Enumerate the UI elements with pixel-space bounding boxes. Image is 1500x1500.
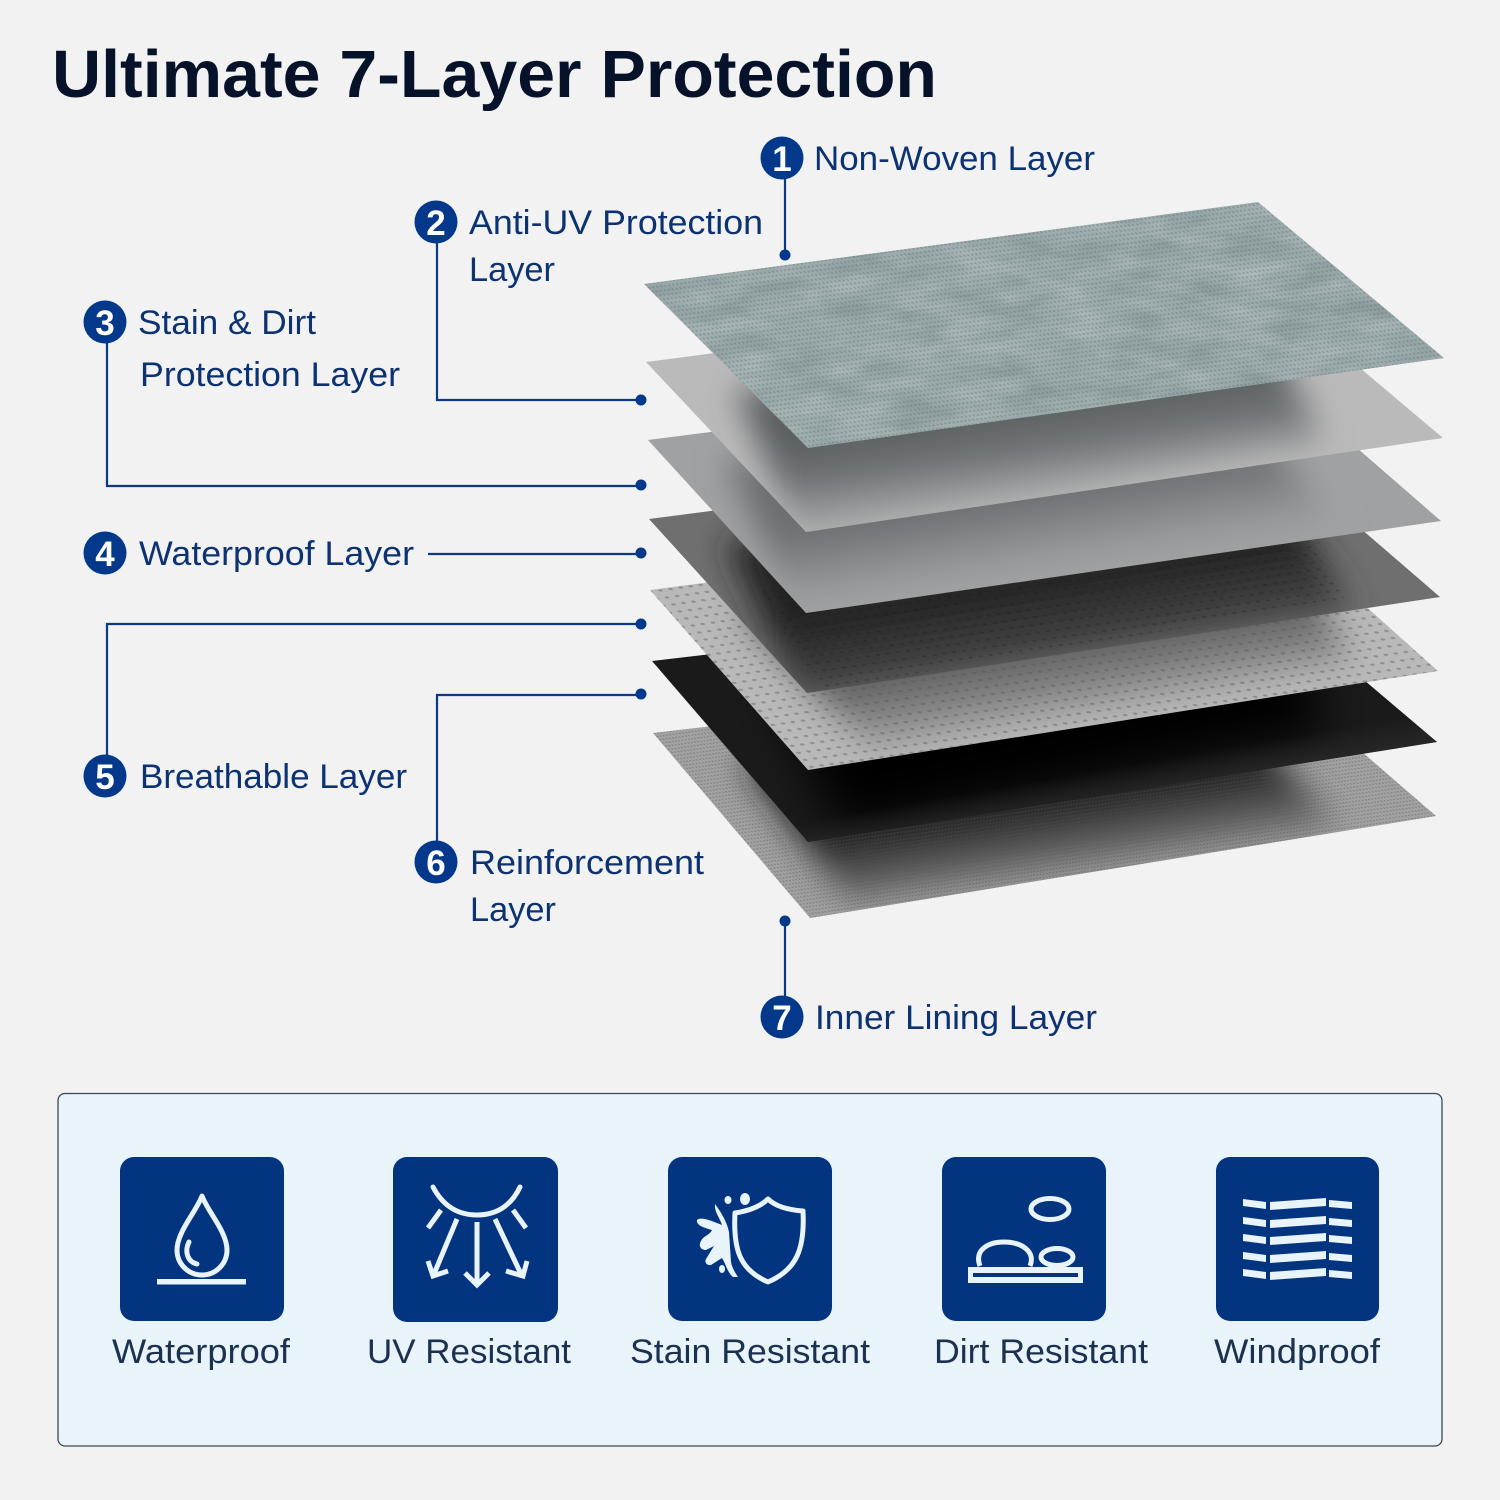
layer 3: stain and dirt protection bbox=[648, 432, 1441, 613]
feature: waterproof bbox=[112, 1157, 291, 1371]
callout 2: anti-UV protection layer: Anti-UV Protection bbox=[469, 204, 763, 242]
callout 3: stain and dirt protection layer: Protection Layer bbox=[140, 356, 400, 394]
icon: wind barrier bbox=[1243, 1198, 1352, 1280]
callout 1: non-woven layer bbox=[760, 136, 1095, 260]
feature: UV resistant: UV Resistant bbox=[367, 1333, 572, 1371]
layer 7: inner lining bbox=[653, 726, 1436, 918]
callout 6: reinforcement layer: Layer bbox=[470, 891, 556, 929]
callout 6: reinforcement layer bbox=[414, 688, 705, 929]
icon: water drop bbox=[157, 1196, 246, 1284]
callout 2: anti-UV protection layer: 2 bbox=[426, 204, 446, 243]
layer 6: reinforcement bbox=[652, 654, 1437, 842]
icon: sun rays with arrows bbox=[428, 1187, 527, 1285]
icon: dirt particles on surface bbox=[968, 1198, 1083, 1283]
layer 5: breathable bbox=[650, 582, 1438, 770]
callout 7: inner lining layer bbox=[760, 916, 1097, 1038]
feature: dirt resistant: Dirt Resistant bbox=[934, 1333, 1149, 1371]
callout 2: anti-UV protection layer bbox=[414, 200, 763, 406]
feature: stain resistant: Stain Resistant bbox=[630, 1333, 871, 1371]
callout 1: non-woven layer: 1 bbox=[772, 140, 792, 179]
callout 5: breathable layer bbox=[84, 618, 646, 798]
feature: windproof bbox=[1214, 1157, 1381, 1371]
layer 2: anti-UV protection bbox=[646, 353, 1443, 532]
callout 6: reinforcement layer: Reinforcement bbox=[470, 844, 705, 882]
callout 3: stain and dirt protection layer: Stain & Dirt bbox=[138, 304, 317, 342]
feature: UV resistant bbox=[367, 1157, 572, 1371]
layer 1: non-woven bbox=[640, 200, 1450, 450]
callout 3: stain and dirt protection layer bbox=[84, 300, 646, 490]
feature: stain resistant bbox=[630, 1157, 871, 1371]
callout 5: breathable layer: 5 bbox=[95, 758, 115, 797]
callout 2: anti-UV protection layer: Layer bbox=[469, 251, 555, 289]
callout 4: waterproof layer bbox=[84, 532, 646, 574]
layer 4: waterproof bbox=[649, 510, 1440, 693]
callout 6: reinforcement layer: 6 bbox=[426, 844, 446, 883]
layer stack illustration bbox=[640, 200, 1450, 918]
title: Ultimate 7-Layer Protection bbox=[52, 37, 937, 112]
callout 5: breathable layer: Breathable Layer bbox=[140, 758, 407, 796]
callout 7: inner lining layer: 7 bbox=[772, 999, 792, 1038]
callout 3: stain and dirt protection layer: 3 bbox=[95, 304, 115, 343]
callout 4: waterproof layer: Waterproof Layer bbox=[139, 535, 414, 573]
callout 7: inner lining layer: Inner Lining Layer bbox=[815, 999, 1097, 1037]
feature: waterproof: Waterproof bbox=[112, 1333, 291, 1371]
panel: features bbox=[58, 1094, 1442, 1446]
callout 4: waterproof layer: 4 bbox=[95, 535, 115, 574]
feature: dirt resistant bbox=[934, 1157, 1149, 1371]
icon: shield with splash bbox=[697, 1193, 803, 1282]
feature: windproof: Windproof bbox=[1214, 1333, 1381, 1371]
callout 1: non-woven layer: Non-Woven Layer bbox=[814, 140, 1095, 178]
